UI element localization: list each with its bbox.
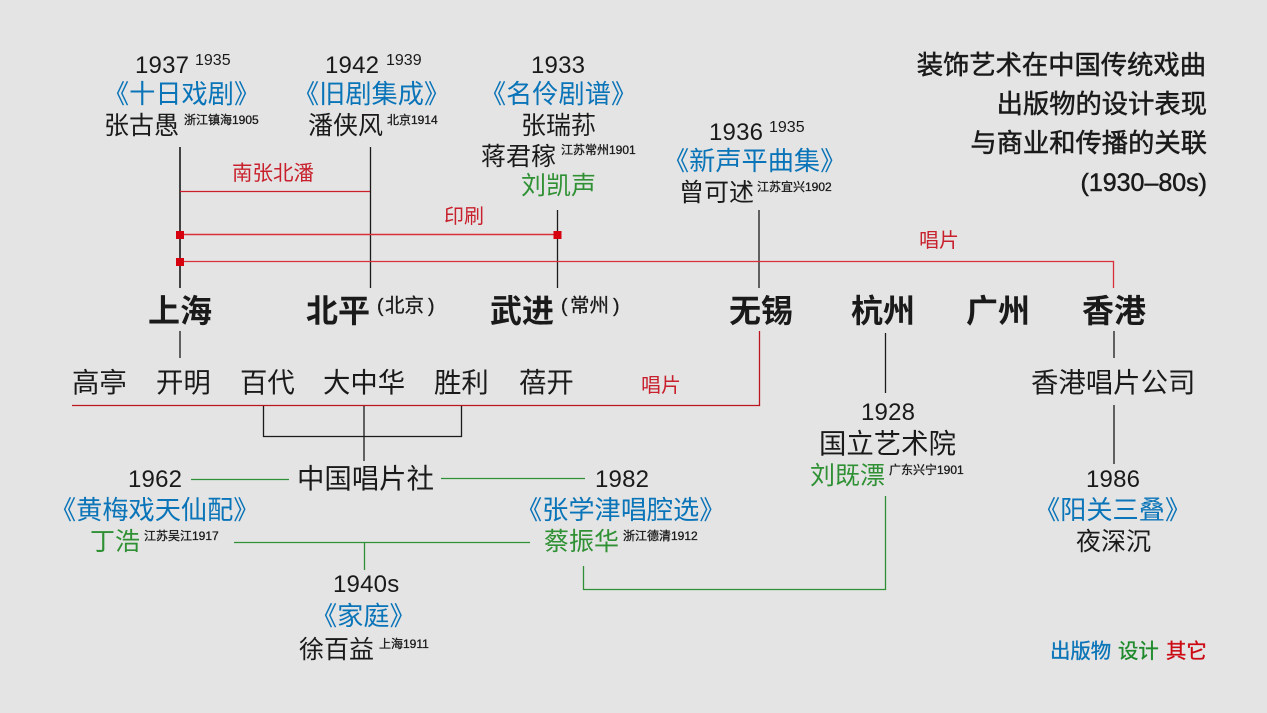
red label: 南张北潘: 南张北潘 [232,162,314,185]
entry: 十日戏剧: 张古愚 [104,112,179,140]
legend: 出版物 [1050,640,1111,663]
entry: 名伶剧谱: 1933 [531,52,585,79]
entry: 阳关三叠: 夜深沉 [1076,528,1151,556]
entry: 家庭: 徐百益 [299,636,374,664]
record companies: 百代 [240,367,295,398]
title: 与商业和传播的关联 [970,128,1207,158]
title [917,50,1207,197]
entry: 国立艺术院: 国立艺术院 [819,428,956,459]
legend: 设计 [1118,640,1159,663]
record companies: 高亭 [72,367,127,398]
record companies: 胜利 [434,367,489,398]
cities: 北平 [306,293,370,329]
entry: 张学津唱腔选 [516,466,726,556]
entry: 十日戏剧: 1935 [195,52,231,69]
entry: 新声平曲集 [663,119,846,207]
entry: 阳关三叠 [1034,466,1191,556]
label: 中国唱片社: 中国唱片社 [297,463,434,494]
entry: 阳关三叠: 《阳关三叠》 [1034,495,1191,525]
entry: 旧剧集成 [293,52,450,140]
connector lines: Shanghai group [180,147,1114,464]
entry: 张学津唱腔选: 1982 [595,466,649,493]
red label: 印刷: 印刷 [444,205,484,228]
red link lines [72,192,1114,406]
entry: 国立艺术院: 1928 [861,399,915,426]
entry: 黄梅戏天仙配: 江苏吴江1917 [144,529,219,543]
entry: 家庭: 1940s [333,571,399,598]
cities: 武进 [490,293,554,329]
entry: 国立艺术院: 广东兴宁1901 [889,462,964,477]
entry: 黄梅戏天仙配: 《黄梅戏天仙配》 [50,495,260,525]
entry: 张学津唱腔选: 浙江德清1912 [623,528,698,543]
entry: 名伶剧谱: 《名伶剧谱》 [480,79,637,109]
record companies: 开明 [156,367,211,398]
entry: 张学津唱腔选: 蔡振华 [544,528,619,556]
legend: 其它 [1166,640,1207,663]
entry: 旧剧集成: 潘侠风 [308,112,383,140]
record companies: 大中华 [323,367,405,398]
entry: 旧剧集成: 《旧剧集成》 [293,79,450,109]
entry: 新声平曲集: 江苏宜兴1902 [757,179,832,194]
record companies [72,367,574,398]
entry: 旧剧集成: 1942 [325,52,379,79]
cities: 广州 [966,293,1030,329]
entry: 十日戏剧: 1937 [135,52,189,79]
entry: 名伶剧谱: 刘凯声 [521,172,596,200]
entry: 十日戏剧: 浙江镇海1905 [184,112,259,127]
label: 香港唱片公司: 香港唱片公司 [1031,367,1195,398]
title: (1930–80s) [1081,169,1207,197]
title: 出版物的设计表现 [997,89,1207,119]
cities: 香港 [1082,293,1146,329]
entry: 新声平曲集: 1935 [769,119,805,136]
entry: 名伶剧谱: 张瑞荪 [521,112,596,140]
entry: 张学津唱腔选: 《张学津唱腔选》 [516,495,726,525]
cities: 无锡 [729,293,793,329]
red label: 唱片 lower: 唱片 [641,374,681,397]
cities: (常州) [561,295,620,317]
red label: 唱片 upper: 唱片 [919,229,959,252]
green link lines [191,478,886,590]
entry: 新声平曲集: 曾可述 [679,179,754,207]
title: 装饰艺术在中国传统戏曲 [917,50,1206,80]
entry: 新声平曲集: 《新声平曲集》 [663,146,846,176]
entry: 名伶剧谱 [480,52,637,200]
red nodes [176,231,562,266]
entry: 家庭 [299,571,429,664]
cities: (北京) [377,295,435,317]
entry: 名伶剧谱: 蒋君稼 [481,143,556,171]
legend [1050,640,1207,663]
entry: 黄梅戏天仙配: 丁浩 [90,528,140,556]
entry: 家庭: 上海1911 [379,636,429,651]
cities [148,293,1146,329]
entry: 新声平曲集: 1936 [709,119,763,146]
entry: 黄梅戏天仙配: 1962 [128,466,182,493]
entry: 旧剧集成: 北京1914 [387,113,438,127]
entry: 国立艺术院 [810,399,964,490]
entry: 家庭: 《家庭》 [311,601,416,631]
entry: 黄梅戏天仙配 [50,466,260,556]
entry: 阳关三叠: 1986 [1086,466,1140,493]
entry: 十日戏剧 [103,52,260,140]
entry: 旧剧集成: 1939 [386,52,422,69]
cities: 上海 [148,293,212,329]
bracket: merger into China Record [264,406,462,461]
entry: 十日戏剧: 《十日戏剧》 [103,79,260,109]
cities: 杭州 [851,293,915,329]
record companies: 蓓开 [519,367,574,398]
entry: 国立艺术院: 刘既漂 [810,462,885,490]
entry: 名伶剧谱: 江苏常州1901 [561,143,636,157]
